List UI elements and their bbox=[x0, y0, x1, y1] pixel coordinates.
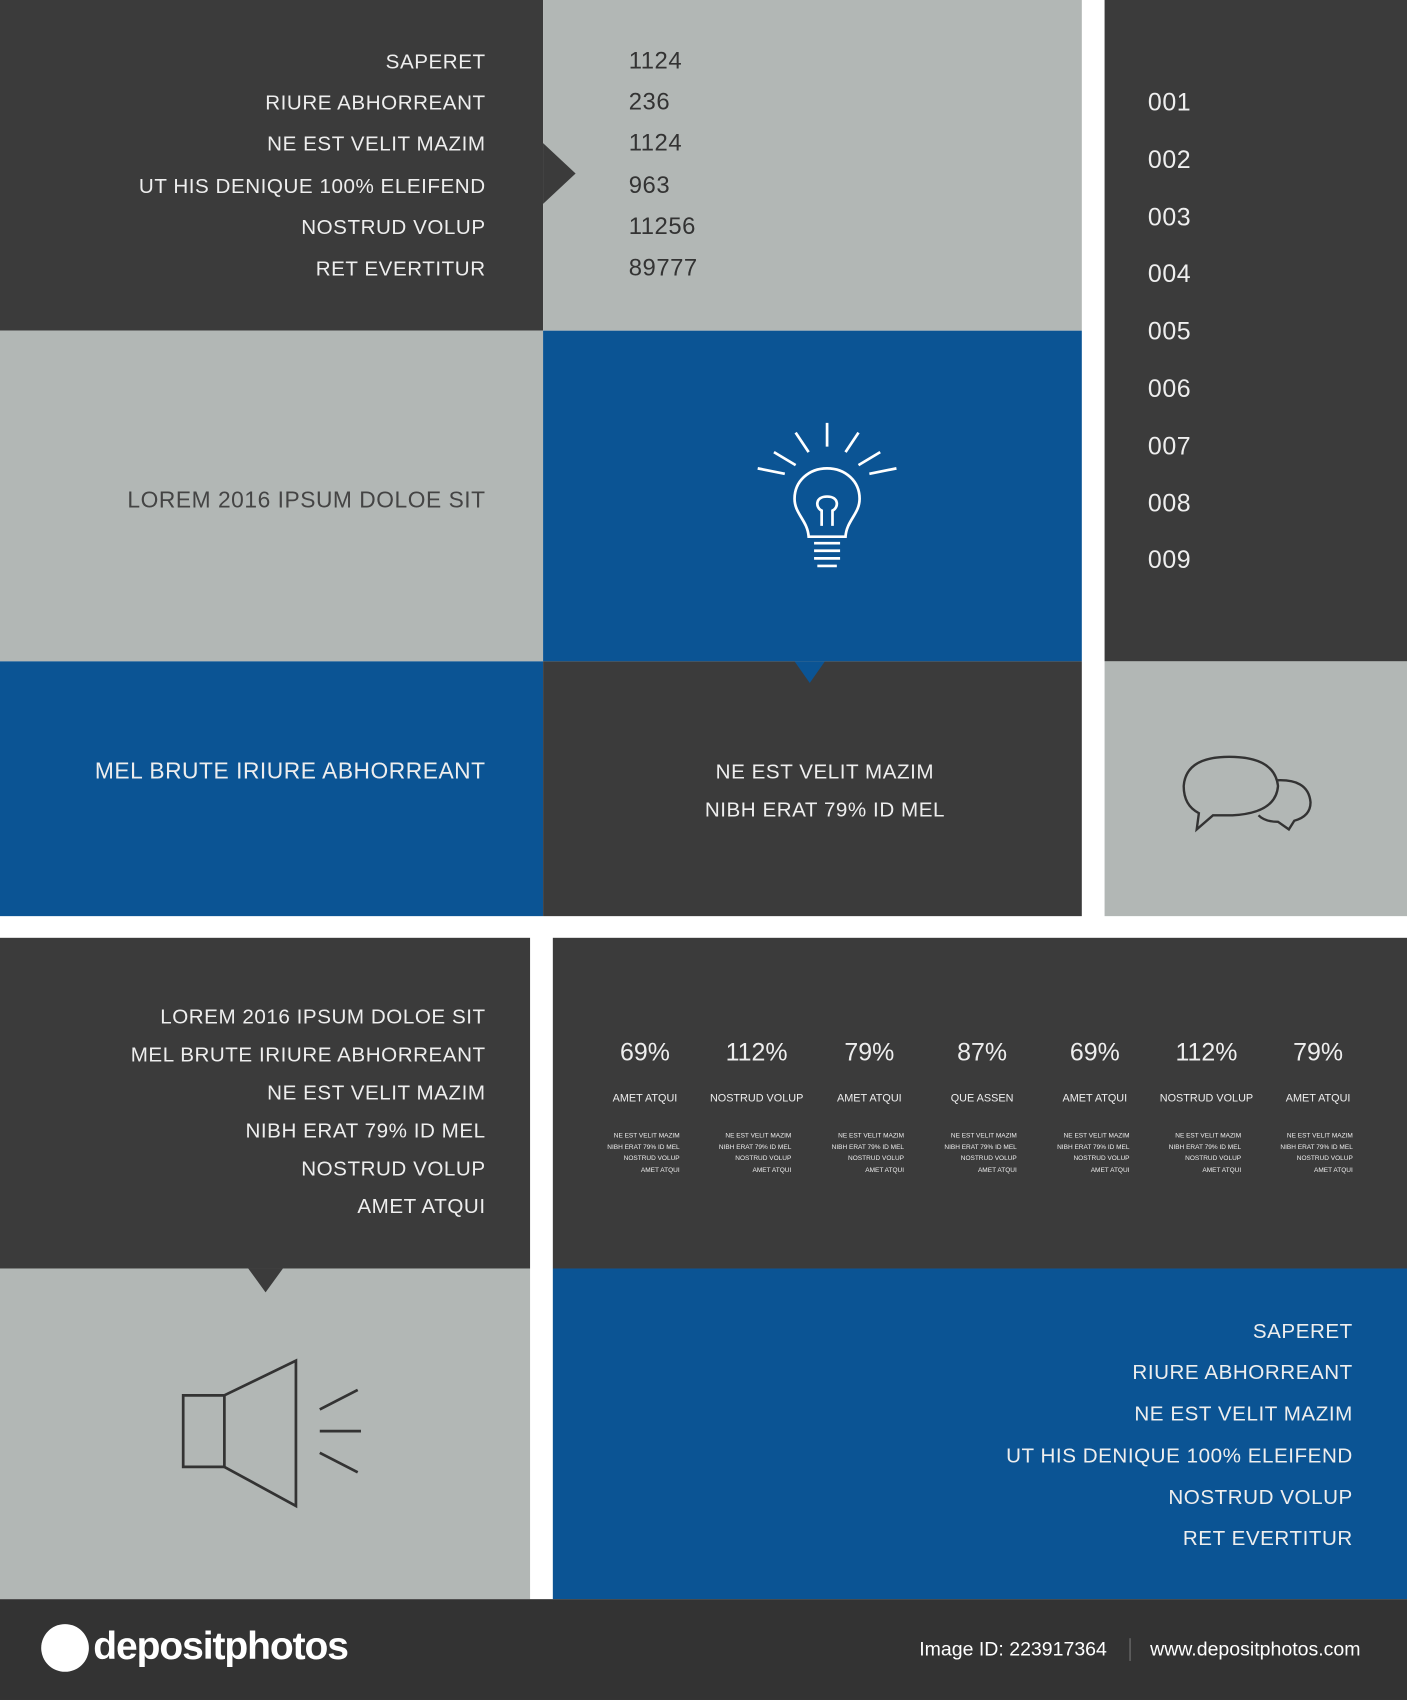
stat 2: NIBH ERAT 79% ID MEL bbox=[719, 1144, 791, 1151]
stat 5: NIBH ERAT 79% ID MEL bbox=[1057, 1144, 1130, 1151]
icon: chat bubbles bbox=[1182, 756, 1312, 832]
stat 4: 87% bbox=[957, 1038, 1007, 1066]
panel: bottom-left dark list bbox=[0, 938, 530, 1268]
stat 4 bbox=[944, 1038, 1017, 1174]
logo: depositphotos bbox=[93, 1623, 348, 1667]
stat 2: NOSTRUD VOLUP bbox=[710, 1093, 803, 1105]
stat 5 bbox=[1057, 1038, 1130, 1174]
stat 2: 112% bbox=[726, 1038, 788, 1066]
text: blue heading: MEL BRUTE IRIURE ABHORREANT bbox=[95, 759, 486, 784]
stat 6: NOSTRUD VOLUP bbox=[1185, 1156, 1241, 1162]
stat 3: AMET ATQUI bbox=[837, 1093, 902, 1105]
arrow: pointer down bbox=[248, 1268, 283, 1292]
text: list: UT HIS DENIQUE 100% ELEIFEND bbox=[1006, 1445, 1353, 1468]
stat 2: NE EST VELIT MAZIM bbox=[725, 1133, 791, 1139]
text: numbers: 1124 bbox=[629, 47, 682, 74]
text: numbers: 963 bbox=[629, 171, 670, 198]
text: codes: 009 bbox=[1148, 546, 1191, 574]
text: numbers: 1124 bbox=[629, 129, 682, 157]
stat 3: NOSTRUD VOLUP bbox=[848, 1156, 904, 1162]
text: codes: 001 bbox=[1148, 88, 1191, 116]
stat 3 bbox=[832, 1038, 904, 1174]
stat 6: 112% bbox=[1176, 1038, 1237, 1066]
text: numbers: 236 bbox=[629, 88, 670, 115]
stat 6: AMET ATQUI bbox=[1202, 1167, 1241, 1174]
image id: Image ID: 223917364 bbox=[919, 1638, 1107, 1660]
text: list: RET EVERTITUR bbox=[1183, 1528, 1353, 1550]
text: list: SAPERET bbox=[1253, 1321, 1353, 1343]
stat 6: NE EST VELIT MAZIM bbox=[1175, 1133, 1241, 1139]
icon: speaker bbox=[182, 1358, 361, 1508]
stat 4: AMET ATQUI bbox=[978, 1167, 1017, 1174]
stat 3: NE EST VELIT MAZIM bbox=[838, 1133, 904, 1139]
stat 4: NE EST VELIT MAZIM bbox=[951, 1133, 1017, 1139]
text: codes: 008 bbox=[1148, 489, 1191, 517]
text: codes: 006 bbox=[1148, 374, 1191, 402]
text: list: NIBH ERAT 79% ID MEL bbox=[245, 1120, 486, 1143]
text: codes: 005 bbox=[1148, 317, 1191, 345]
stat 6: NOSTRUD VOLUP bbox=[1160, 1093, 1253, 1105]
stat 7 bbox=[1280, 1038, 1353, 1174]
stat 7: NIBH ERAT 79% ID MEL bbox=[1280, 1144, 1353, 1151]
text: list labels: RET EVERTITUR bbox=[316, 258, 486, 281]
text: list: NOSTRUD VOLUP bbox=[1168, 1486, 1353, 1509]
panel: right numbered list bbox=[1105, 0, 1407, 661]
stat 3: AMET ATQUI bbox=[865, 1167, 904, 1174]
text: list: NOSTRUD VOLUP bbox=[301, 1158, 486, 1181]
text: list: NE EST VELIT MAZIM bbox=[267, 1082, 486, 1105]
stat 3: 79% bbox=[844, 1038, 894, 1066]
stat 5: AMET ATQUI bbox=[1062, 1093, 1127, 1105]
icon: lightbulb bbox=[757, 422, 897, 568]
stat 7: AMET ATQUI bbox=[1286, 1093, 1350, 1105]
url: www.depositphotos.com bbox=[1150, 1638, 1361, 1660]
panel: dark middle bbox=[543, 661, 1082, 916]
footer bbox=[0, 1599, 1407, 1700]
text: list: AMET ATQUI bbox=[357, 1196, 486, 1219]
stat 1: NE EST VELIT MAZIM bbox=[614, 1133, 680, 1139]
stat 4: NOSTRUD VOLUP bbox=[961, 1156, 1017, 1162]
stat 5: 69% bbox=[1070, 1038, 1120, 1066]
text: list labels: RIURE ABHORREANT bbox=[265, 92, 486, 115]
stat 4: NIBH ERAT 79% ID MEL bbox=[944, 1144, 1017, 1151]
text: list labels bbox=[139, 51, 486, 281]
text: numbers bbox=[629, 47, 698, 281]
text: codes: 004 bbox=[1148, 260, 1191, 288]
text: list: MEL BRUTE IRIURE ABHORREANT bbox=[131, 1044, 486, 1067]
text: list labels: SAPERET bbox=[386, 51, 486, 74]
panel: lightbulb blue bbox=[543, 331, 1082, 661]
text: list bbox=[131, 1006, 486, 1219]
panel: lorem gray bbox=[0, 331, 543, 661]
arrow: pointer down bbox=[795, 661, 825, 683]
panel: top-left list bbox=[0, 0, 543, 331]
text: list labels: NE EST VELIT MAZIM bbox=[267, 134, 486, 157]
panel: blue left bbox=[0, 661, 543, 916]
text: codes: 003 bbox=[1148, 202, 1191, 230]
stat 7: NE EST VELIT MAZIM bbox=[1287, 1133, 1353, 1139]
arrow: pointer right bbox=[543, 143, 576, 204]
stat 4: QUE ASSEN bbox=[951, 1093, 1013, 1105]
text: list: RIURE ABHORREANT bbox=[1132, 1362, 1353, 1385]
text: list bbox=[1006, 1321, 1353, 1550]
text: two lines: NE EST VELIT MAZIM bbox=[716, 761, 934, 784]
stat 6 bbox=[1160, 1038, 1253, 1174]
stat 5: NOSTRUD VOLUP bbox=[1073, 1156, 1130, 1162]
stat 1: NIBH ERAT 79% ID MEL bbox=[607, 1144, 680, 1151]
stat 1 bbox=[607, 1038, 680, 1174]
stat 6: NIBH ERAT 79% ID MEL bbox=[1169, 1144, 1241, 1151]
text: two lines bbox=[705, 761, 945, 822]
stat 1: 69% bbox=[620, 1038, 670, 1066]
stat 1: NOSTRUD VOLUP bbox=[624, 1156, 680, 1162]
text: numbers: 11256 bbox=[629, 212, 696, 239]
stat 7: NOSTRUD VOLUP bbox=[1297, 1156, 1353, 1162]
text: list: LOREM 2016 IPSUM DOLOE SIT bbox=[160, 1006, 486, 1029]
stat 3: NIBH ERAT 79% ID MEL bbox=[832, 1144, 904, 1151]
stat 7: AMET ATQUI bbox=[1314, 1167, 1353, 1174]
stat 1: AMET ATQUI bbox=[613, 1093, 677, 1105]
panel: stats dark bbox=[553, 938, 1407, 1268]
panel: top numbers bbox=[543, 0, 1082, 331]
stat 2: AMET ATQUI bbox=[753, 1167, 791, 1174]
text: list: NE EST VELIT MAZIM bbox=[1134, 1403, 1353, 1426]
stat 7: 79% bbox=[1293, 1038, 1343, 1066]
text: codes: 007 bbox=[1148, 431, 1191, 459]
text: list labels: NOSTRUD VOLUP bbox=[301, 217, 486, 239]
text: numbers: 89777 bbox=[629, 254, 698, 281]
stat 5: AMET ATQUI bbox=[1091, 1167, 1130, 1174]
stat 5: NE EST VELIT MAZIM bbox=[1064, 1133, 1130, 1139]
text: codes bbox=[1148, 88, 1191, 574]
panel: speaker gray bbox=[0, 1268, 530, 1599]
stat 1: AMET ATQUI bbox=[641, 1167, 680, 1174]
text: lorem heading: LOREM 2016 IPSUM DOLOE SIT bbox=[127, 488, 486, 513]
stat 2: NOSTRUD VOLUP bbox=[735, 1156, 791, 1162]
text: list labels: UT HIS DENIQUE 100% ELEIFEND bbox=[139, 175, 486, 198]
stat 2 bbox=[710, 1038, 803, 1174]
text: codes: 002 bbox=[1148, 145, 1191, 173]
text: two lines: NIBH ERAT 79% ID MEL bbox=[705, 799, 945, 822]
panel: right chat bbox=[1105, 661, 1407, 916]
panel: bottom-right blue list bbox=[553, 1268, 1407, 1599]
